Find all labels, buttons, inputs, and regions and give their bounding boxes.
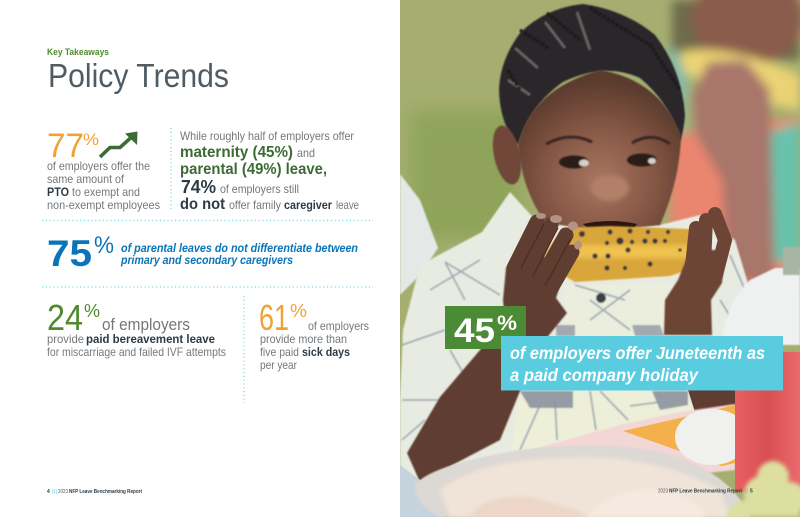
stat: 61% sick days: [259, 297, 369, 372]
stat: 61% sick days: five paid: [260, 345, 299, 359]
fingers of right hand: [690, 214, 725, 285]
child's left arm and palm: [407, 245, 567, 482]
PTO description: non-exempt employees: [47, 198, 160, 212]
footer: left page: 2023: [58, 489, 68, 495]
yellow napkin: [623, 405, 735, 466]
mouth: [583, 221, 637, 228]
left sleeve at bottom: [400, 465, 445, 517]
footer: right page: 2023: [658, 488, 668, 494]
child's plaid shirt: [400, 192, 750, 490]
stat: 75% parental leaves: %: [94, 232, 114, 259]
PTO description: same amount of: [47, 172, 125, 186]
stat: maternity, parental and caregiver leave: caregiver: [284, 198, 332, 212]
callout: 45% badge: [445, 306, 526, 350]
stat: 75% parental leaves: of parental leaves do not differentiate between: [121, 243, 358, 255]
icon: rising arrow: [100, 132, 138, 157]
child's face: [518, 70, 681, 232]
nose: [591, 175, 629, 201]
footer: left page: |1|: [52, 489, 57, 495]
stat: maternity, parental and caregiver leave: 74%: [181, 177, 216, 197]
stat: 77% PTO: [47, 127, 160, 212]
eyes and brows: [546, 137, 670, 168]
stat: maternity, parental and caregiver leave: parental (49%) leave,: [180, 161, 327, 178]
white pitcher: [722, 268, 800, 345]
callout: 45% badge: 45: [454, 312, 495, 350]
stat: 24% bereavement leave: 24: [47, 297, 83, 338]
footer: left page: 4: [47, 489, 50, 495]
stat: maternity, parental and caregiver leave: While roughly half of employers offer: [180, 129, 354, 143]
77 percent figure: 77: [47, 127, 84, 165]
callout: 45% badge: %: [497, 312, 517, 335]
stat: maternity, parental and caregiver leave: [180, 129, 359, 213]
footer: right page: 5: [750, 488, 753, 494]
stat: maternity, parental and caregiver leave: of employers still: [220, 182, 299, 196]
child's right hand and wrist: [664, 250, 725, 335]
child's forearm below banner: [688, 390, 735, 412]
stat: maternity, parental and caregiver leave: maternity (45%): [180, 144, 293, 161]
finger creases of left hand: [521, 224, 570, 286]
stat: 24% bereavement leave: for miscarriage and failed IVF attempts: [47, 345, 226, 359]
title: Policy Trends: Policy Trends: [48, 57, 229, 94]
stat: maternity, parental and caregiver leave: and: [297, 146, 315, 160]
child's ear: [492, 124, 522, 186]
stat: 24% bereavement leave: provide: [47, 332, 84, 346]
stat: maternity, parental and caregiver leave: leave: [336, 198, 359, 212]
stat: 24% bereavement leave: [47, 297, 226, 359]
fingernails of left hand: [536, 213, 582, 250]
stat: maternity, parental and caregiver leave: do not: [180, 196, 226, 213]
braided hair: [499, 4, 685, 145]
stat: 61% sick days: sick days: [302, 345, 350, 359]
footer: right page: |1|: [743, 488, 748, 494]
callout: Juneteenth holiday: [501, 336, 783, 390]
footer: left page: NFP Leave Benchmarking Report: [69, 489, 142, 495]
stat: 24% bereavement leave: %: [84, 301, 100, 321]
stat: 75% parental leaves: primary and secondary caregivers: [120, 255, 293, 267]
plate of cookies: [415, 445, 750, 517]
stat: 24% bereavement leave: of employers: [102, 315, 190, 334]
white shoulder at left edge: [400, 174, 438, 295]
glass: [783, 247, 800, 275]
callout: Juneteenth holiday: of employers offer Juneteenth as: [510, 343, 765, 363]
PTO description: [47, 159, 160, 212]
section label: Key Takeaways: Key Takeaways: [47, 47, 109, 58]
stat: maternity, parental and caregiver leave: offer family: [229, 198, 281, 212]
photo: child eating grilled corn: [400, 0, 800, 517]
table cloth: [538, 403, 735, 474]
stat: 75% parental leaves: [47, 232, 358, 274]
PTO description: to exempt and: [72, 185, 140, 199]
stat: 61% sick days: 61: [259, 297, 289, 338]
77 percent figure: %: [83, 130, 99, 149]
footer: right page: NFP Leave Benchmarking Report: [669, 488, 742, 494]
stat: 61% sick days: per year: [260, 358, 297, 372]
stat: 24% bereavement leave: paid bereavement leave: [86, 332, 215, 346]
grapes: [725, 461, 800, 517]
background person, blurred: [668, 0, 800, 290]
stat: 75% parental leaves: 75: [47, 233, 92, 274]
red cup: [735, 352, 800, 492]
small white plate: [675, 409, 735, 465]
stat: 61% sick days: of employers: [308, 319, 369, 333]
grilled corn: [540, 226, 694, 282]
stat: 61% sick days: provide more than: [260, 332, 347, 346]
callout: Juneteenth holiday: a paid company holiday: [510, 365, 699, 385]
PTO description: of employers offer the: [47, 159, 150, 173]
PTO description: PTO: [47, 185, 69, 199]
stat: 61% sick days: %: [290, 301, 307, 321]
fingers of left hand: [514, 222, 572, 290]
